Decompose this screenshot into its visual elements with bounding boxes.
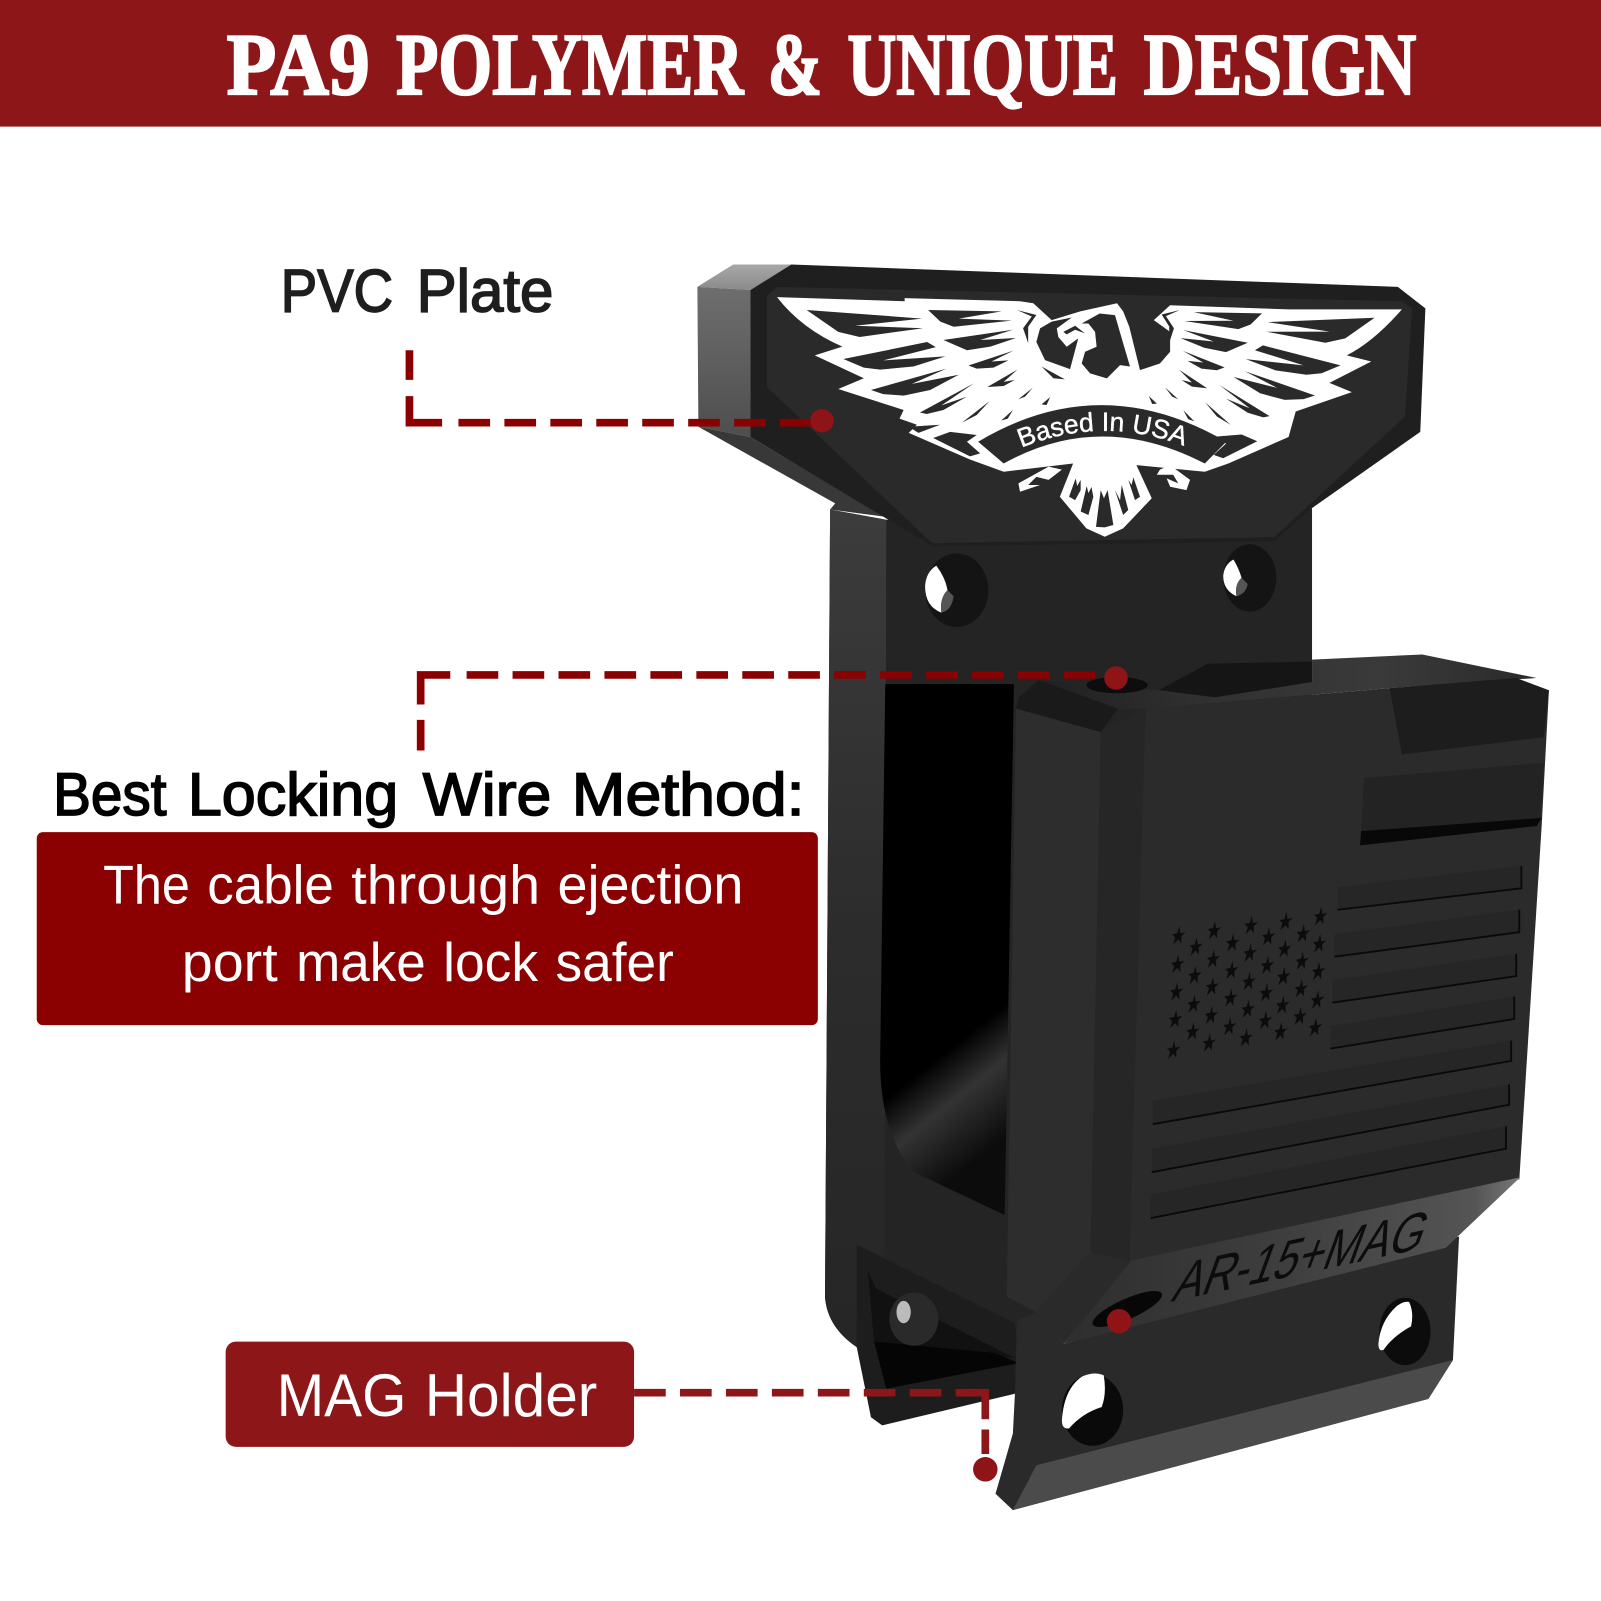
callout line: MAG Holder [634,1393,998,1482]
box top [1019,654,1537,709]
plate holes [925,544,1276,627]
title [227,16,1416,113]
lower bevel [1013,1360,1453,1510]
box side face [1007,709,1101,1312]
label: PVC Plate: PVC [281,256,393,324]
title: UNIQUE [847,16,1118,113]
description text: safer [555,931,674,993]
cable slot [1089,1284,1166,1334]
magazine box [1007,654,1549,1312]
talons [1018,465,1190,492]
angled chamfer [1064,1177,1520,1344]
heading: Best Locking Wire Method: Method: [572,760,805,828]
lower mounting plate [996,1177,1520,1510]
banner [978,405,1226,464]
label: PVC Plate [281,256,553,324]
title: & [768,16,822,113]
plate holes [1062,1374,1123,1446]
callout line: PVC Plate [409,350,834,432]
T plate front [750,264,1425,546]
flag stars [1167,907,1327,1059]
label: MAG Holder [226,1342,634,1447]
box front face [1129,688,1549,1263]
back plate body [825,508,1312,1348]
magazine slot [880,684,1014,1215]
panel: locking wire description [37,832,818,1025]
marker: cable port dot [1107,1309,1131,1333]
description text: through [351,854,540,916]
flag stripes [1151,866,1521,1218]
right wing feathers [1149,309,1375,464]
description text: make [296,931,426,993]
callout line: locking wire [421,666,1128,750]
heading: Best Locking Wire Method: Wire [423,760,551,828]
header banner [0,0,1601,127]
title: DESIGN [1144,16,1416,113]
heading: Best Locking Wire Method: Best [53,760,167,828]
top-right tab [1390,678,1549,755]
heading: Best Locking Wire Method [53,760,805,828]
title: POLYMER [396,16,745,113]
description text: port [182,931,278,993]
T plate side faces [697,264,791,290]
left wing feathers [807,310,1065,456]
label: PVC Plate: Plate [417,256,553,324]
eagle head [1036,313,1130,378]
description text: The [103,854,190,916]
label: MAG Holder: Holder [425,1361,597,1429]
description text: ejection [557,854,743,916]
product: wall-mount magazine holder [697,264,1549,1510]
lower left bracket [857,1245,1019,1425]
heading: Best Locking Wire Method: Locking [188,760,398,828]
eagle logo [777,297,1402,537]
rear post [1159,662,1312,697]
description text [103,854,743,993]
description text: lock [443,931,539,993]
tail slits [1069,477,1140,527]
engraved text: AR-15+MAG [1166,1197,1439,1314]
rectangular recess [1361,763,1544,831]
title: PA9 [227,16,370,113]
label: MAG Holder: MAG [277,1361,406,1429]
box top-left chamfer [1016,680,1118,732]
banner text: Based In USA [1016,412,1184,448]
description text: cable [207,854,334,916]
